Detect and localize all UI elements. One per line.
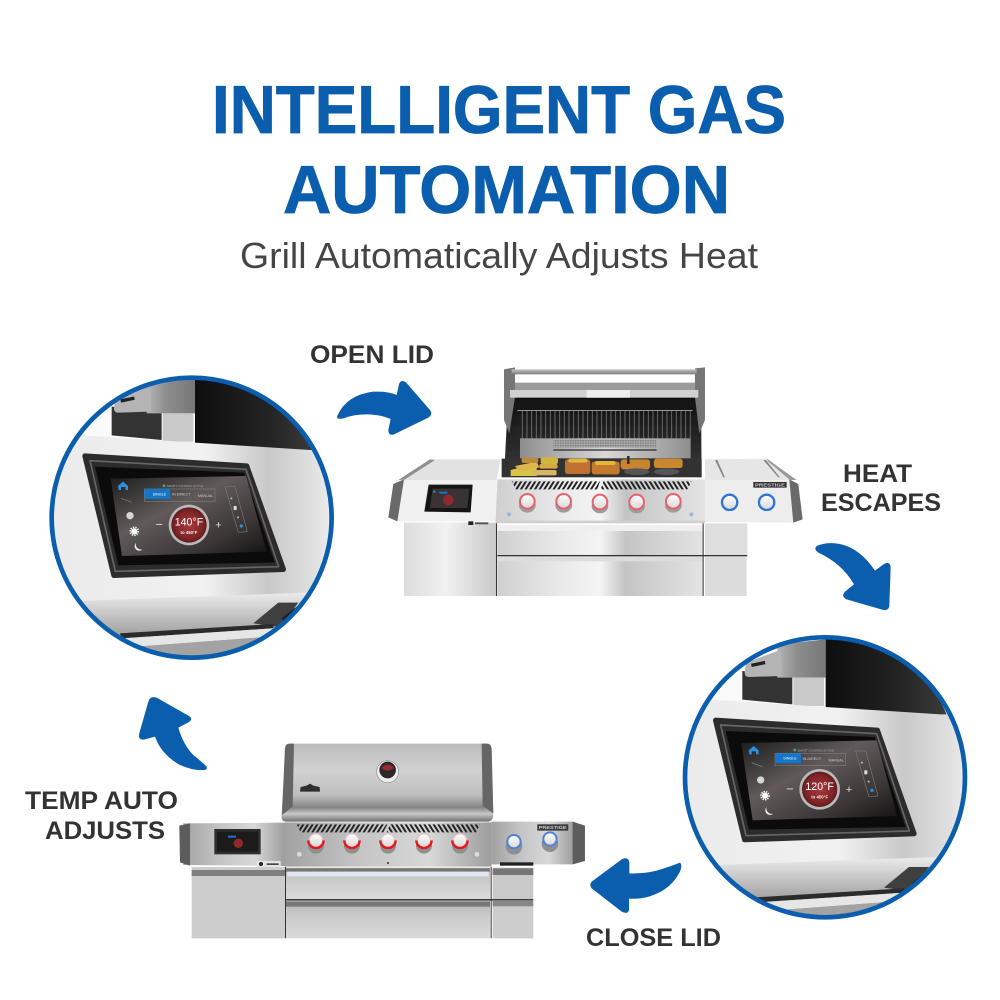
right side shelf (705, 459, 803, 523)
mode tabs: SMART COOKING ACTIVE (797, 748, 834, 752)
prestige badge (537, 824, 568, 831)
arrow: close lid (590, 858, 681, 913)
cart cabinets (404, 522, 747, 596)
temperature dial (169, 505, 209, 545)
mode tabs: MANUAL (829, 758, 844, 762)
side knobs with blue rings (722, 495, 774, 510)
subtitle: Grill Automatically Adjusts Heat (240, 235, 758, 276)
cart cabinets (192, 867, 533, 938)
temperature dial: to 450°F (181, 530, 198, 535)
grill: closed lid (179, 744, 585, 938)
minus and plus: − (786, 782, 794, 796)
mode tabs: MANUAL (198, 494, 213, 498)
mode tabs: SINGLE (783, 757, 797, 761)
left side shelf (388, 459, 501, 521)
temperature dial: 140°F (175, 517, 204, 529)
open lid interior (504, 367, 705, 477)
arrow: heat escapes (815, 543, 891, 610)
mode tabs: SINGLE (153, 492, 167, 496)
side status bar (225, 487, 247, 532)
label: close lid: CLOSE LID (586, 924, 721, 952)
side status bar (856, 751, 878, 797)
label: temp auto adjusts: ADJUSTS (45, 817, 165, 845)
mode tabs (775, 748, 846, 766)
side knobs with blue rings (506, 832, 558, 855)
lid thermometer (377, 761, 399, 783)
label: open lid: OPEN LID (310, 341, 434, 369)
prestige badge (753, 482, 787, 488)
mode tabs: IN-DIRECT (803, 757, 822, 761)
touchscreen bezel (85, 456, 283, 575)
minus and plus (786, 786, 852, 792)
screen icons (749, 746, 773, 815)
dock ports (468, 521, 488, 525)
center control panel (285, 822, 492, 867)
arrow: open lid to grill (337, 381, 431, 435)
circle: control panel at 120F (682, 635, 968, 920)
minus and plus: + (846, 784, 852, 796)
dock ports (257, 861, 281, 867)
touchscreen bezel (716, 720, 914, 840)
prestige badge: PRESTIGE (539, 825, 567, 830)
burner knobs with red rings (308, 834, 468, 854)
minus and plus (156, 522, 221, 528)
mode tabs: IN-DIRECT (172, 493, 191, 497)
burner knobs with red rings (519, 494, 682, 513)
temperature dial: to 450°F (811, 794, 828, 799)
label: temp auto adjusts (25, 787, 178, 845)
arrow: temp auto adjusts (139, 697, 207, 770)
right side shelf (492, 822, 585, 866)
label: heat escapes (821, 460, 941, 517)
label: temp auto adjusts: TEMP AUTO (25, 787, 178, 815)
center control panel (496, 479, 705, 523)
label: heat escapes: HEAT (843, 460, 912, 488)
minus and plus: − (156, 518, 163, 532)
temperature dial (799, 769, 840, 810)
closed lid (282, 744, 493, 822)
mode tabs: SMART COOKING ACTIVE (167, 484, 203, 488)
label: heat escapes: ESCAPES (821, 489, 941, 517)
title line 1: INTELLIGENT GAS (212, 72, 786, 148)
circle: control panel at 140F (40, 370, 340, 670)
minus and plus: + (215, 520, 221, 532)
mode tabs (144, 484, 215, 501)
food on the grate (502, 456, 702, 477)
brand logo (300, 784, 320, 792)
small touchscreen (424, 485, 473, 512)
small touchscreen (214, 829, 261, 854)
temperature dial: 120°F (805, 781, 834, 793)
grill: open lid (388, 367, 803, 596)
left side shelf (179, 823, 285, 866)
prestige badge: PRESTIGE (755, 482, 785, 487)
screen icons (118, 482, 143, 551)
title line 2: AUTOMATION (283, 152, 730, 228)
